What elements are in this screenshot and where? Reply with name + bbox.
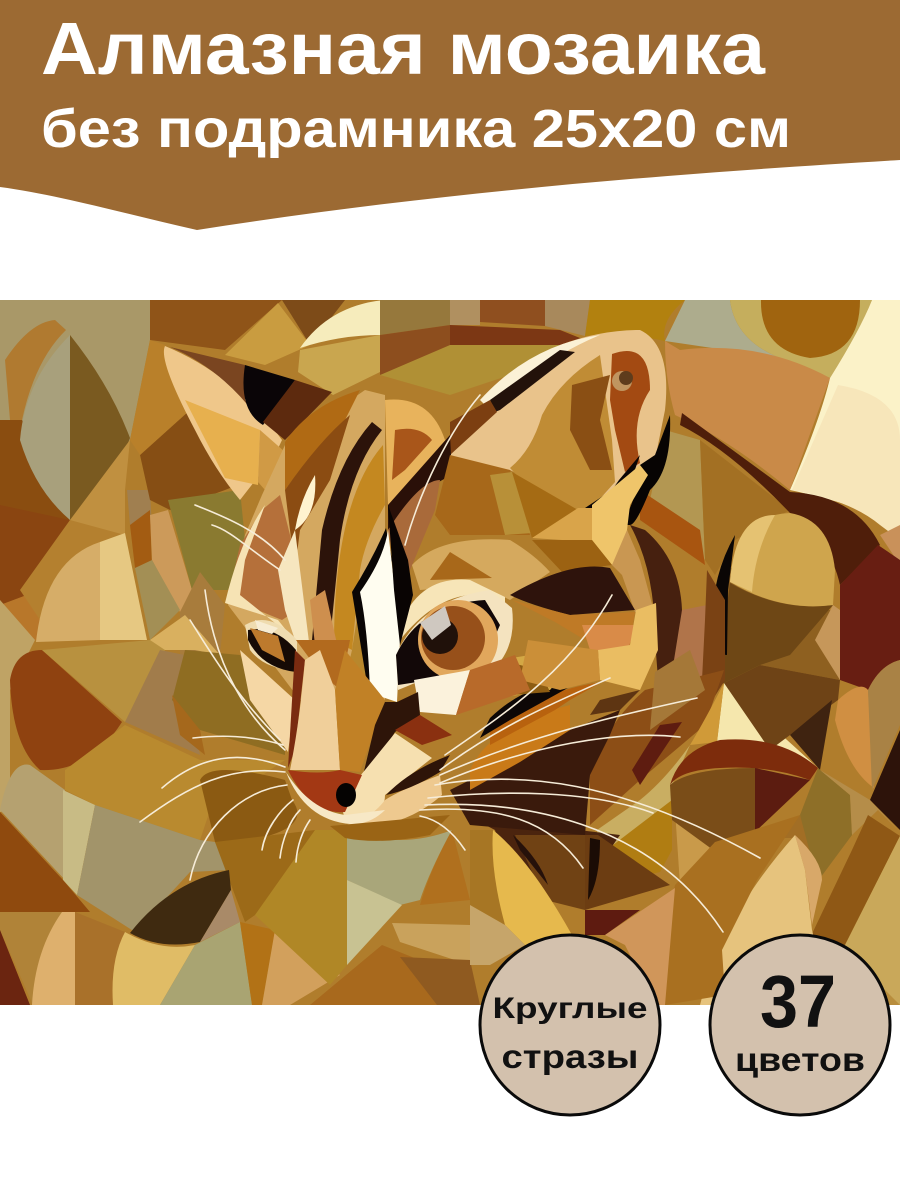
subtitle: без подрамника 25х20 см (41, 99, 791, 159)
header banner (0, 0, 900, 230)
background: left bottom (0, 765, 480, 1005)
whiskers (140, 395, 760, 932)
badge: 37 colours: 37 (760, 960, 836, 1043)
badge: 37 colours: цветов (735, 1041, 865, 1078)
background: left middle (0, 490, 285, 840)
artwork: cat mosaic (0, 300, 900, 1005)
background: top left (0, 300, 685, 605)
badge: round rhinestones: Круглые (492, 992, 648, 1025)
background: top right (640, 300, 900, 690)
cat crown and brow (385, 400, 658, 690)
cat right ear (450, 330, 670, 525)
badge: 37 colours (710, 935, 890, 1115)
cat forehead stripes (225, 390, 385, 700)
background: bottom right (470, 525, 900, 1005)
cat left ear (164, 346, 332, 500)
cat: dark whisker zone (448, 650, 640, 835)
badge: round rhinestones (480, 935, 660, 1115)
cat white nose stripe (352, 505, 413, 702)
title: Алмазная мозаика (41, 7, 766, 90)
cat right eye (396, 590, 530, 715)
badge: round rhinestones: стразы (502, 1038, 638, 1075)
cat left eye (245, 620, 297, 672)
cat nose and muzzle (240, 640, 452, 841)
